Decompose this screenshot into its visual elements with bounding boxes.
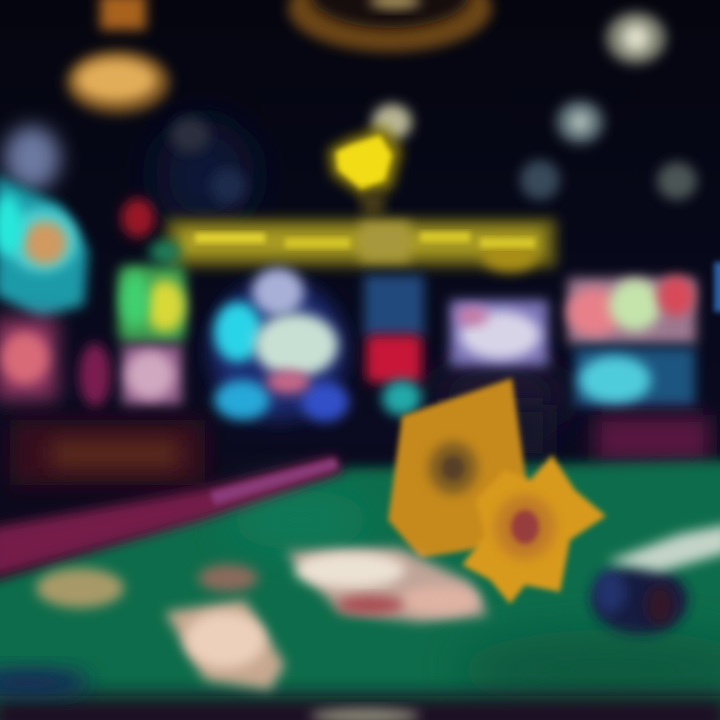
- yellow emblem: [328, 104, 412, 216]
- ceiling lamp: left: [66, 0, 170, 114]
- green table felt: [0, 460, 720, 720]
- ceiling lights: [170, 12, 697, 204]
- slot sign: centre star: [210, 268, 349, 422]
- slot machine: centre column: [364, 275, 424, 416]
- gold card: [388, 378, 526, 558]
- table front edge: [0, 669, 720, 720]
- slot sign: far left: [0, 126, 111, 407]
- chip stack: [592, 524, 720, 634]
- yellow banner sign: [165, 218, 557, 272]
- playing cards: [36, 548, 488, 690]
- ceiling ornament: top centre: [288, 0, 492, 52]
- gold flower chip: [462, 455, 606, 604]
- slot machine: left: [118, 198, 186, 405]
- table rail: purple edge: [0, 456, 342, 578]
- slot sign: right rainbow: [567, 262, 720, 406]
- lower machine bases: [10, 405, 710, 485]
- slot sign: right centre: [450, 300, 548, 366]
